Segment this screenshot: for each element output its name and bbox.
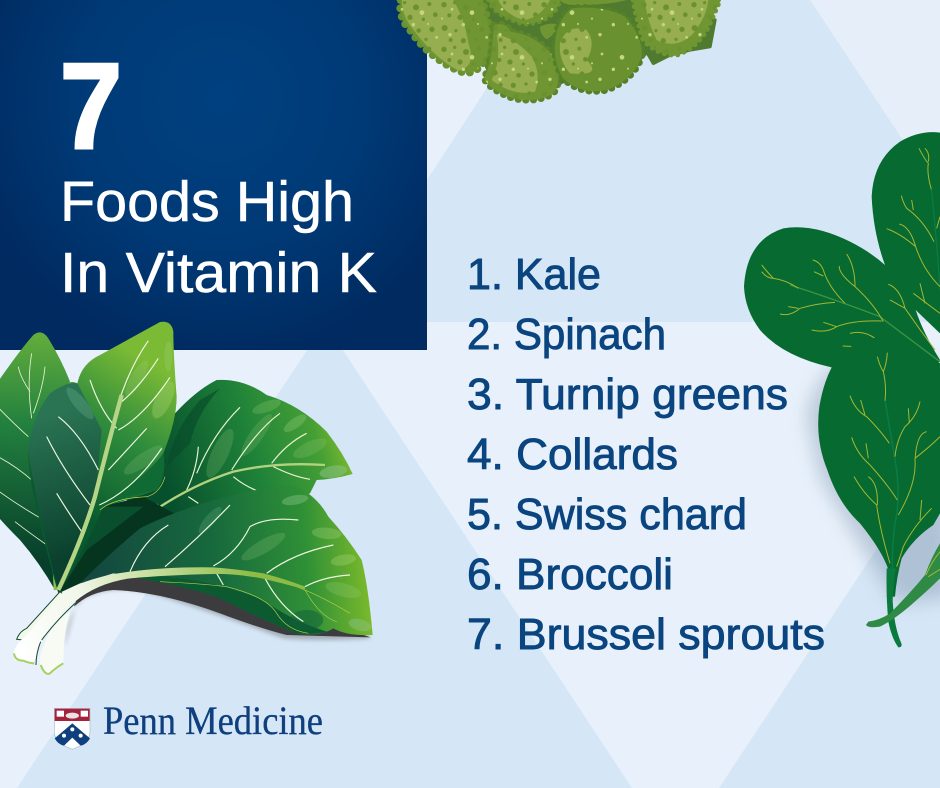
- small floret: [540, 24, 559, 39]
- cast shadow: [65, 577, 371, 647]
- list item 3: 3. Turnip greens: [467, 370, 788, 419]
- centre upper leaf: [28, 322, 179, 593]
- title panel: [0, 0, 427, 350]
- soft shadow: [807, 343, 940, 603]
- lower leaf: [818, 337, 940, 597]
- lower stalk: [39, 612, 71, 673]
- heading line 1: Foods High: [60, 170, 354, 234]
- list item 7: 7. Brussel sprouts: [467, 610, 825, 659]
- back stalk: [17, 592, 67, 640]
- logo: Penn Medicine: [54, 698, 323, 749]
- floret lower centre: [484, 24, 558, 100]
- left leaf: [744, 227, 940, 383]
- midrib: [143, 464, 325, 518]
- food list: [467, 250, 825, 659]
- list item 1: 1. Kale: [467, 250, 601, 299]
- right upper leaf: [93, 380, 353, 560]
- dark gap between leaves: [58, 497, 180, 593]
- back left leaf: [0, 332, 70, 590]
- floret top centre: [488, 0, 560, 24]
- lower large leaf: [80, 485, 373, 635]
- heading line 2: In Vitamin K: [60, 241, 377, 305]
- floret centre right: [555, 8, 642, 91]
- big number: 7: [60, 38, 122, 174]
- illustration: spinach leaves: [744, 132, 940, 647]
- illustration: kale leaves: [0, 322, 373, 674]
- stems: [866, 543, 940, 647]
- floret top right edge: [560, 0, 627, 5]
- white stems: [13, 567, 305, 674]
- list item 6: 6. Broccoli: [467, 550, 673, 599]
- list item 4: 4. Collards: [467, 430, 678, 479]
- illustration: broccoli: [400, 0, 720, 100]
- front stalk: [13, 567, 305, 663]
- top leaf: [872, 132, 940, 333]
- icon: Penn shield: [54, 708, 90, 749]
- list item 5: 5. Swiss chard: [467, 490, 747, 539]
- centre midrib: [58, 395, 122, 590]
- floret left: [400, 0, 489, 73]
- floret right: [633, 0, 720, 55]
- wordmark: Penn Medicine: [103, 698, 323, 743]
- list item 2: 2. Spinach: [467, 310, 666, 359]
